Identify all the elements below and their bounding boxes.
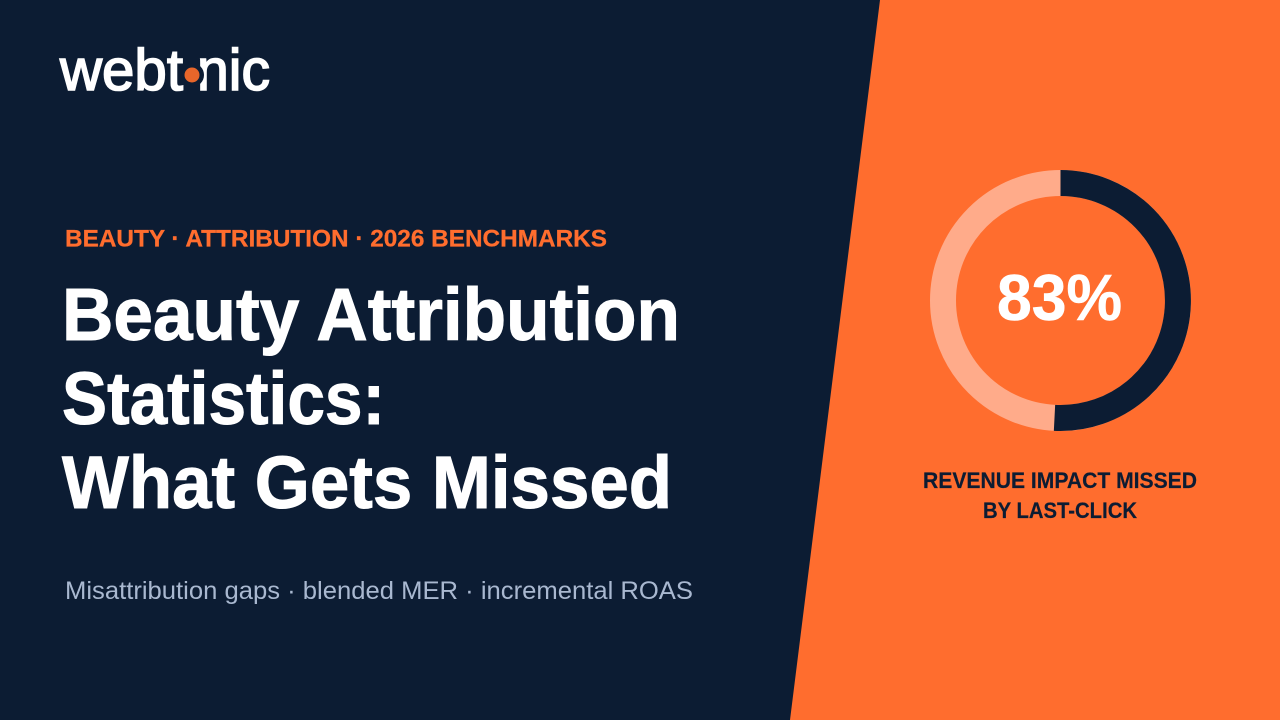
stat label: BY LAST-CLICK bbox=[983, 498, 1137, 523]
logo: webtonic: webt bbox=[59, 38, 183, 103]
logo: webtonic bbox=[59, 38, 270, 103]
stat label bbox=[923, 468, 1197, 523]
logo: webtonic: nic bbox=[197, 38, 270, 103]
panel: orange slanted stat panel bbox=[790, 0, 1280, 720]
title: What Gets Missed bbox=[62, 441, 672, 524]
donut chart: 83% revenue impact: 83% bbox=[997, 261, 1122, 334]
subtitle: Misattribution gaps · blended MER · incremental ROAS bbox=[65, 577, 693, 605]
stat label: REVENUE IMPACT MISSED bbox=[923, 468, 1197, 493]
eyebrow heading: BEAUTY · ATTRIBUTION · 2026 BENCHMARKS bbox=[65, 226, 607, 252]
title: Beauty Attribution bbox=[62, 273, 680, 356]
title: Statistics: bbox=[62, 357, 385, 440]
title bbox=[62, 273, 680, 524]
donut chart: 83% revenue impact bbox=[943, 183, 1178, 418]
